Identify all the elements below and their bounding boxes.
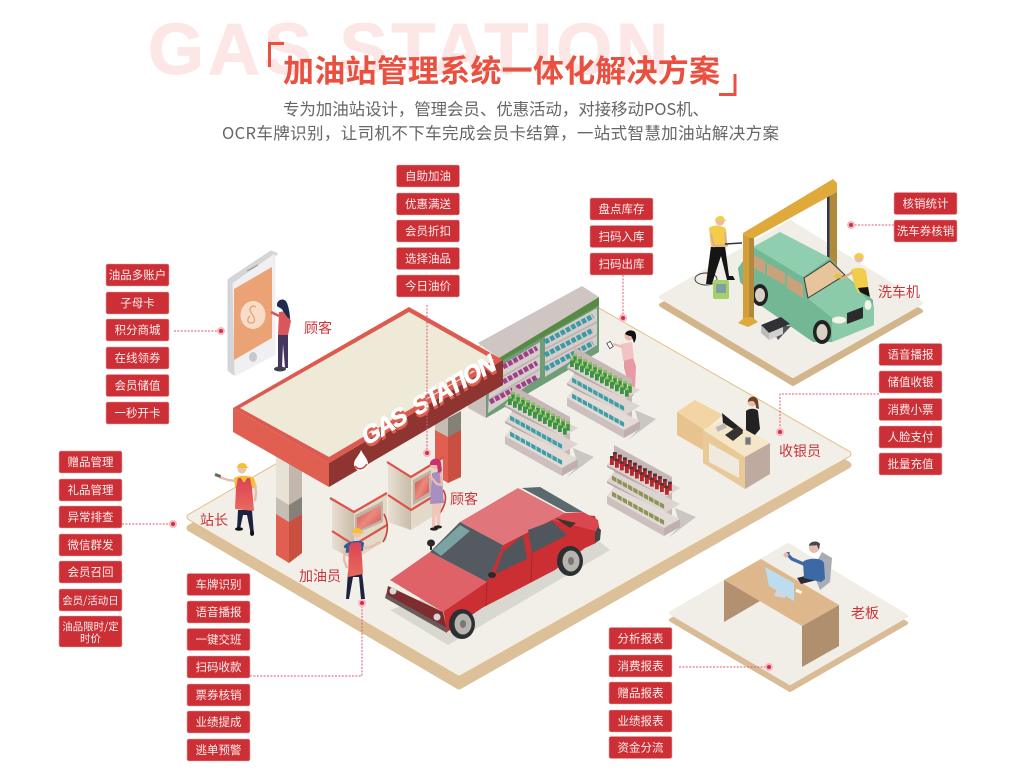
tag [106,292,169,314]
tag: 赠品报表 [618,685,664,701]
tag: 自助加油 [405,168,451,184]
front canopy pillar [276,450,302,563]
labels: 洗车机 [878,282,920,302]
car front [386,586,447,630]
tag [59,534,122,556]
tag [106,374,169,396]
tag [59,561,122,583]
labels [200,282,920,623]
tag: 盘点库存 [598,201,644,217]
gantry back post [827,183,837,275]
tag group: boss [609,628,672,758]
tag [59,506,122,528]
labels: 老板 [851,603,879,623]
tag [187,656,250,678]
canopy roof [233,307,503,463]
tag: 资金分流 [618,740,664,756]
canopy left fascia [233,408,329,487]
office desk [724,559,839,667]
car hood [390,552,487,612]
tag [106,319,169,341]
tag: 会员折扣 [405,223,451,239]
store shelves [505,347,696,538]
car rear deck [552,512,600,532]
wash man wiping car [834,253,870,297]
canopy right fascia [329,360,503,487]
fuel pump: back [387,457,445,530]
tag: 积分商城 [114,322,161,338]
tag: 一键交班 [196,632,242,648]
sign text: GAS STATION [359,349,499,452]
tag: two-line: 油品限时/定 [62,619,119,634]
tag: 语音播报 [196,604,242,620]
car windshield [430,522,503,582]
customer at pump [430,459,444,531]
tag group: attendant [187,574,250,761]
tag [187,574,250,596]
back canopy pillar [435,411,461,483]
canopy with sign [233,307,503,487]
car body side [443,513,599,632]
labels: 顾客 [450,489,478,509]
subtitle [222,96,780,144]
gantry frame [738,179,837,327]
tag [59,451,122,473]
tag [59,479,122,501]
tag group: mobile customer [106,264,169,424]
tag: 语音播报 [888,346,934,362]
tag: 会员/活动日 [62,593,119,608]
car shadow [390,538,610,645]
subtitle: OCR车牌识别，让司机不下车完成会员卡结算，一站式智慧加油站解决方案 [222,120,780,144]
tag: 扫码出库 [598,256,644,272]
tag: 票券核销 [196,687,242,703]
car battery [761,317,791,340]
car side windows [495,518,576,574]
tag group: cashier [879,344,942,475]
tag: 选择油品 [405,250,451,266]
icon: fuel drop [354,450,368,471]
car wheels [449,546,583,639]
tag [187,684,250,706]
leader line: cashier [776,394,879,436]
tag: 业绩报表 [618,713,664,729]
title: 加油站管理系统一体化解决方案 [283,46,720,91]
car rear window [522,487,583,512]
boss [784,542,832,590]
tag: 异常排查 [68,509,114,525]
tag: 微信群发 [68,537,114,553]
leader line: pump customer [423,305,431,457]
background watermark: GAS STATION: GAS STATION [148,10,668,90]
leader line: attendant [250,599,366,676]
tag [106,347,169,369]
labels: 加油员 [299,566,341,586]
tag group: pump customer [396,165,460,297]
car mirrors and details [390,527,601,620]
station manager [214,463,257,536]
leader line: station manager [122,520,177,528]
tag: 批量充值 [888,456,934,472]
tag: 消费小票 [888,402,934,418]
tag: 车牌识别 [196,576,242,592]
tag: two-line: 时价 [80,631,101,646]
title bracket: left [270,44,284,67]
tag: 子母卡 [120,295,155,311]
tag group: store stock [590,198,653,275]
tag: 优惠满送 [405,196,451,212]
subtitle: 专为加油站设计，管理会员、优惠活动，对接移动POS机、 [283,96,709,120]
cashier desk [677,400,770,489]
tag [187,628,250,650]
green car [738,232,874,344]
title bracket: right [719,74,735,94]
tag: 人脸支付 [888,429,934,445]
tag: 扫码收款 [196,659,242,675]
tag: 在线领券 [114,350,161,366]
tag [187,601,250,623]
tag: 会员储值 [114,378,161,394]
tag: 消费报表 [618,658,664,674]
tag [59,589,122,611]
leader line: store stock [619,275,627,322]
tag group: car wash [894,192,957,242]
leader line: car wash [847,221,894,229]
shopper woman [607,330,636,396]
leader line: boss [679,663,773,671]
tag: 礼品管理 [68,482,114,498]
wall shelf unit [468,286,599,418]
fuel pump: front [330,493,387,560]
tag: 会员召回 [68,564,114,580]
tag group: station manager [59,451,122,647]
tag: 分析报表 [618,630,664,646]
tag: 储值收银 [888,374,934,390]
tag: 洗车券核销 [897,223,954,239]
tag: 逃单预警 [196,742,242,758]
labels: 收银员 [779,441,821,461]
sign text shadow: GAS STATION [360,352,500,455]
fuel attendant [344,528,380,599]
tag: 业绩提成 [196,714,242,730]
computer monitor [765,567,802,601]
tag: 今日油价 [405,278,451,294]
labels: 顾客 [304,318,332,338]
cashier person [746,397,760,435]
tag [187,711,250,733]
customer with phone [271,299,291,372]
labels: 站长 [200,510,228,530]
POS terminal [716,413,751,445]
detergent can [713,280,729,299]
panel: main station floor [190,296,848,686]
tag: two-line [59,616,122,647]
tag: 油品多账户 [109,267,166,283]
red car [385,487,610,645]
tag: 扫码入库 [598,228,644,244]
tag [187,739,250,761]
tag [106,264,169,286]
tag: 赠品管理 [68,454,114,470]
panel: wash bay floor [661,222,921,384]
leader line: app customer [174,327,225,335]
tag: 核销统计 [902,196,949,212]
panel: boss office floor [671,545,906,690]
wash man with spray gun [695,216,742,285]
phone with mini-program screen [229,252,276,374]
tag: 一秒开卡 [114,405,160,421]
car roof [460,488,565,545]
tag [106,402,169,424]
